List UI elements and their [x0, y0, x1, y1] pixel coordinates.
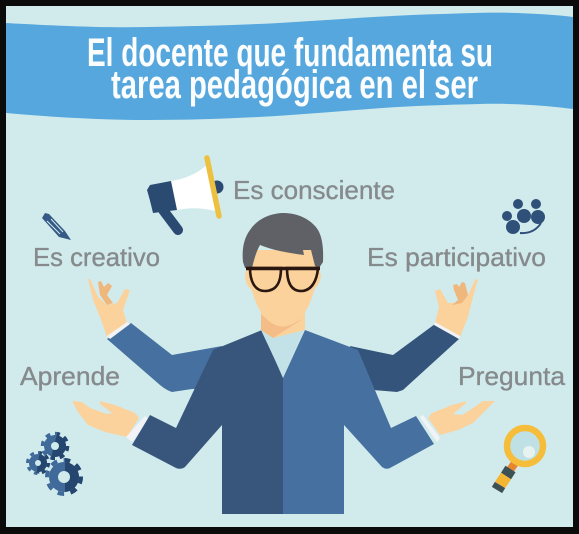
upper right cuff — [434, 322, 460, 339]
neck — [261, 310, 305, 338]
suit: right side — [283, 330, 434, 514]
gear: large — [47, 460, 81, 494]
upper right hand — [435, 279, 478, 337]
upper left cuff — [107, 322, 130, 339]
label: Es creativo: Es creativo — [33, 242, 160, 272]
shirt collar — [261, 320, 304, 377]
gear: left — [28, 452, 48, 474]
label: Aprende: Aprende — [20, 361, 120, 391]
label: Es participativo: Es participativo — [367, 242, 546, 272]
label: Pregunta: Pregunta — [458, 361, 566, 391]
icon: megaphone — [147, 158, 224, 230]
suit: left side — [132, 330, 283, 514]
lower left cuff — [126, 416, 149, 442]
lower right cuff — [420, 415, 440, 442]
title — [87, 31, 493, 107]
lower right hand — [428, 401, 495, 435]
title banner — [6, 13, 573, 120]
figure: teacher — [72, 213, 495, 514]
right back arm — [350, 324, 459, 392]
icon: group of people — [502, 199, 545, 234]
hair — [243, 213, 323, 268]
lower left hand — [72, 401, 139, 437]
face — [245, 250, 321, 326]
label: Es consciente: Es consciente — [233, 175, 395, 205]
upper left hand — [88, 279, 130, 337]
icon: gears — [28, 434, 81, 494]
glasses — [246, 268, 320, 291]
icon: pencil — [42, 213, 71, 240]
left back arm — [107, 323, 222, 392]
icon: magnifying glass — [497, 428, 543, 490]
gear: top — [42, 434, 68, 458]
